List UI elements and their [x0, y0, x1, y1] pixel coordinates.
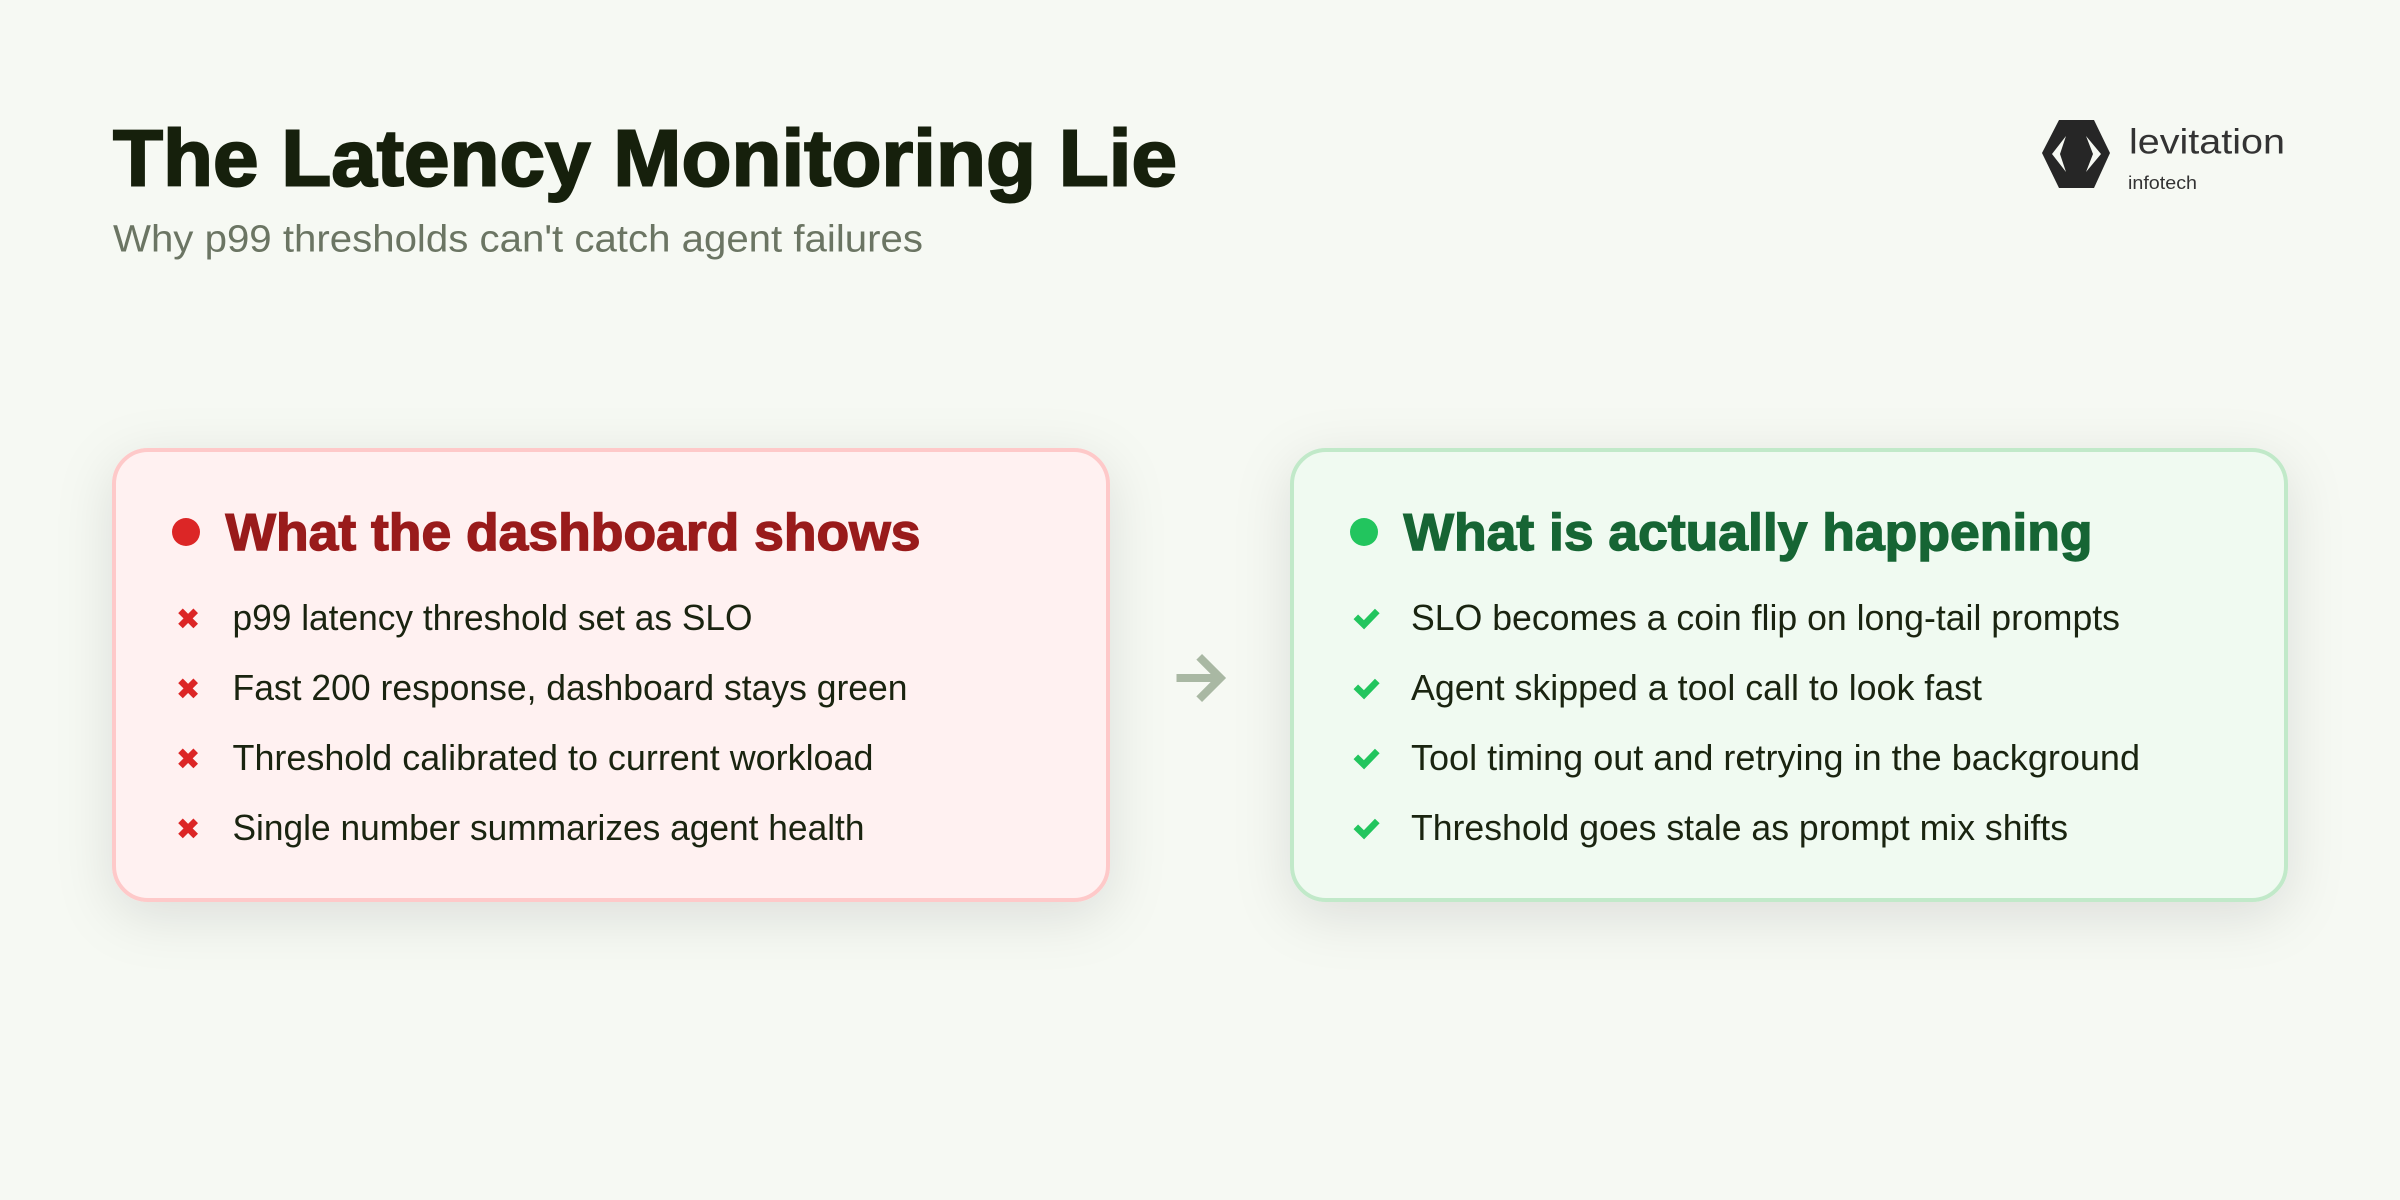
list item 4: Single number summarizes agent health — [232, 807, 864, 848]
logo — [2042, 120, 2285, 193]
panel background — [114, 450, 1108, 900]
list item 3: Tool timing out and retrying in the background — [1411, 737, 2140, 778]
list item 1: SLO becomes a coin flip on long-tail prompts — [1411, 597, 2120, 638]
panel heading: What is actually happening — [1404, 504, 2092, 562]
list item 2: Fast 200 response, dashboard stays green — [232, 667, 908, 708]
icon: hexagon logo mark — [2042, 120, 2110, 188]
panel: what is actually happening — [1292, 450, 2286, 900]
list item 2: Agent skipped a tool call to look fast — [1411, 667, 1982, 708]
panel: what the dashboard shows — [114, 450, 1108, 900]
subtitle: Why p99 thresholds can't catch agent failures — [113, 218, 923, 260]
list item 1: p99 latency threshold set as SLO — [232, 597, 752, 638]
list item 4: Threshold goes stale as prompt mix shifts — [1411, 807, 2068, 848]
panel background — [1292, 450, 2286, 900]
panel heading: What the dashboard shows — [226, 504, 920, 562]
status dot red — [172, 518, 200, 546]
list item 3: Threshold calibrated to current workload — [232, 737, 874, 778]
title: The Latency Monitoring Lie — [113, 114, 1177, 202]
status dot green — [1350, 518, 1378, 546]
logo wordmark: levitation — [2129, 122, 2285, 162]
arrow — [1176, 657, 1220, 699]
logo subtext: infotech — [2128, 173, 2197, 193]
